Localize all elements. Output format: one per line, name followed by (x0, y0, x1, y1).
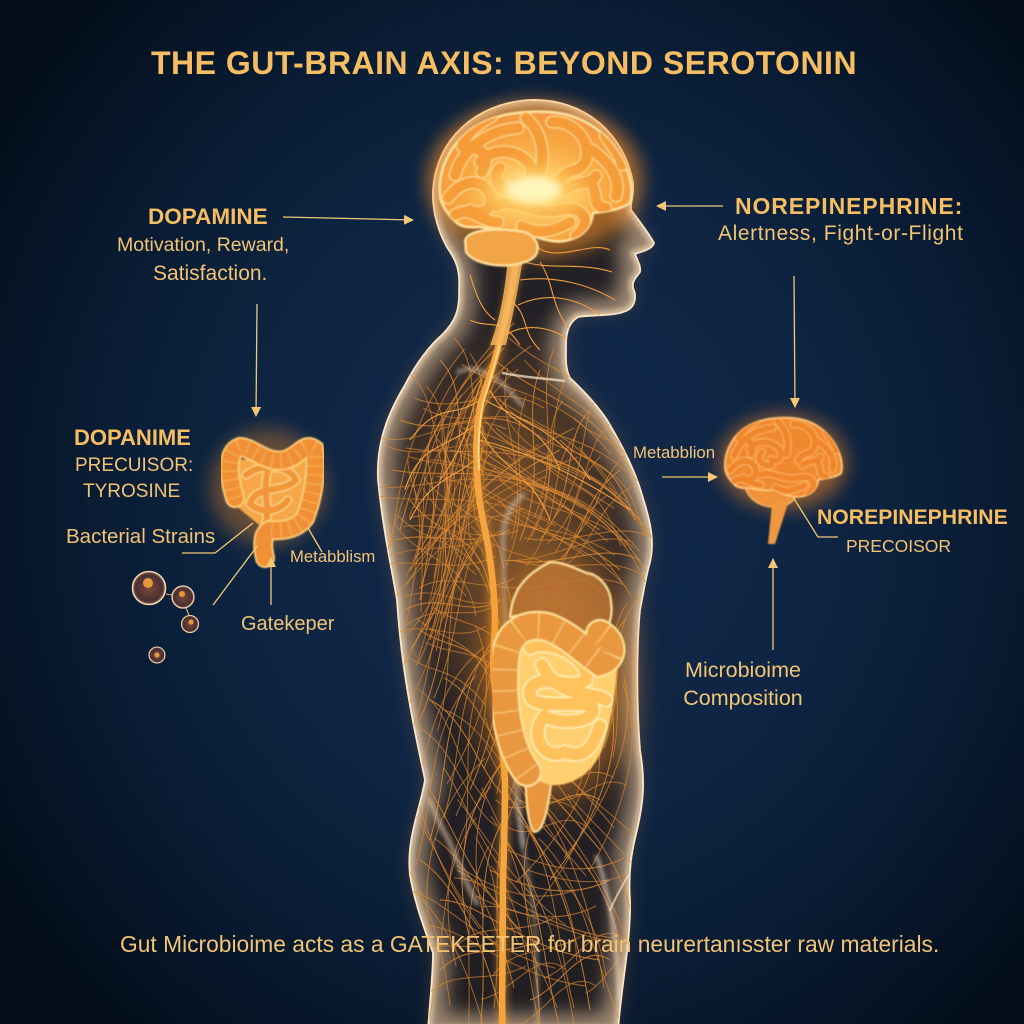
label: gatekeeper: Gatekeper (241, 613, 334, 635)
text: dopamine precursor: TYROSINE (83, 481, 180, 502)
illustration: translucent human body with glowing brain, gut, nerves and arrows (132, 88, 859, 1024)
arrows and leader lines (182, 206, 838, 650)
main brain (427, 102, 643, 266)
small gut on left (210, 429, 326, 558)
text: norepinephrine precursor (817, 506, 1008, 556)
text: norepinephrine precursor: PRECOISOR (846, 536, 951, 556)
label: microbiome composition: Microbioime (685, 658, 801, 682)
label: microbiome composition: Composition (683, 686, 803, 710)
text: dopamine callout: Satisfaction. (153, 262, 267, 285)
text: dopamine callout: Motivation, Reward, (117, 234, 289, 256)
anatomical contours (430, 369, 630, 1024)
nerve network (378, 247, 652, 1024)
spinal cord (476, 257, 523, 1024)
body silhouette (365, 100, 655, 1024)
text: dopamine precursor: DOPANIME (74, 425, 191, 450)
text: norepinephrine callout (718, 193, 964, 245)
label: microbiome composition (683, 658, 803, 710)
text: norepinephrine callout: Alertness, Fight-or-Flight (718, 222, 964, 245)
text: dopamine precursor: PRECUISOR: (75, 455, 193, 476)
text: norepinephrine precursor: NOREPINEPHRINE (817, 506, 1008, 529)
label: bacterial strains: Bacterial Strains (66, 525, 215, 548)
abdominal gut (483, 562, 627, 832)
label: metabolism right: Metabblion (633, 443, 715, 462)
label: metabolism left: Metabblism (290, 547, 375, 566)
footer statement: Gut Microbioime acts as a GATEKEETER for brain neurertanısster raw materials. (120, 931, 939, 957)
bacteria cells (132, 572, 198, 663)
text: dopamine precursor (74, 425, 193, 502)
text: dopamine callout (117, 204, 289, 285)
text: dopamine callout: DOPAMINE (148, 204, 268, 229)
text: norepinephrine callout: NOREPINEPHRINE: (735, 193, 963, 219)
title: THE GUT-BRAIN AXIS: BEYOND SEROTONIN (151, 45, 857, 81)
small brain on right (719, 414, 847, 544)
